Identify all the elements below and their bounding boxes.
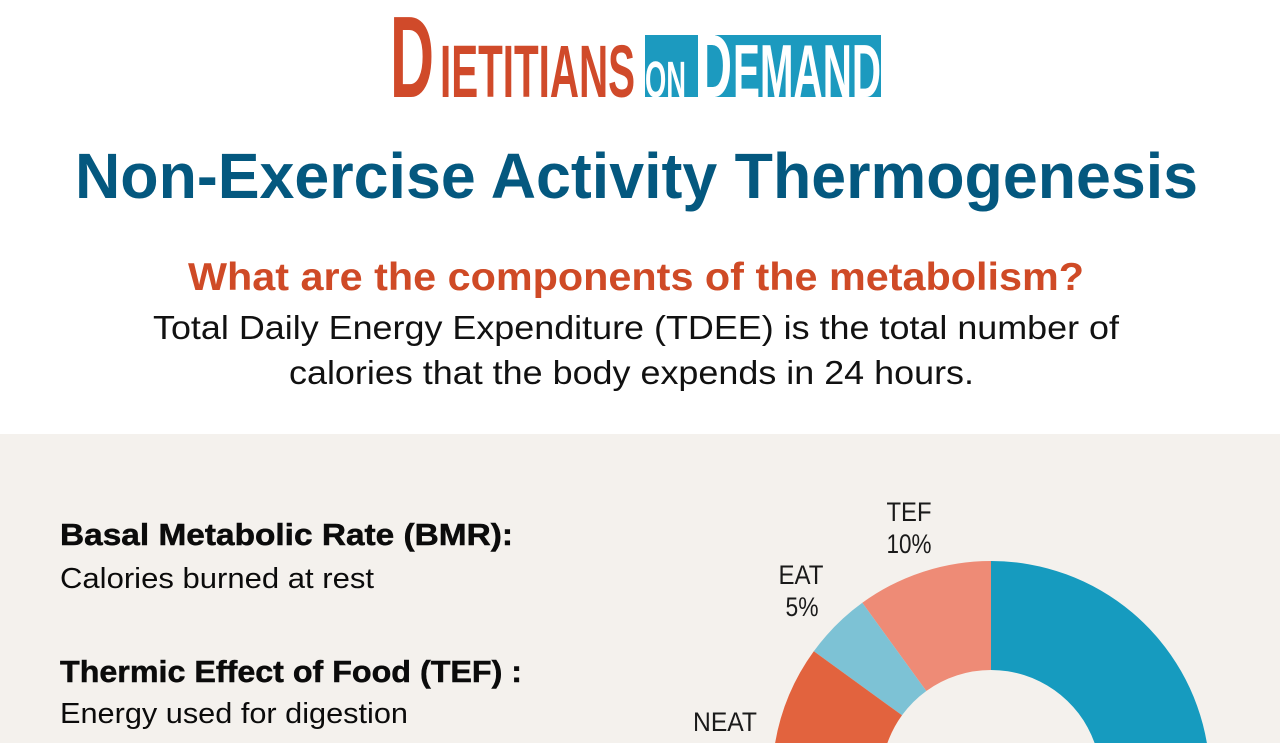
chart label: NEAT: NEAT [693, 707, 757, 737]
chart label: TEF: TEF [886, 497, 932, 527]
text block: BMR: Basal Metabolic Rate (BMR): [60, 517, 513, 552]
donut chart [775, 561, 1207, 743]
intro text [153, 309, 1120, 391]
text block: BMR [60, 517, 513, 595]
text block: TEF [60, 654, 522, 730]
text block: TEF: Thermic Effect of Food (TEF) : [60, 654, 522, 689]
logo: Dietitians on Demand: IETITIANS [440, 30, 635, 113]
panel: metabolism components [0, 434, 1280, 743]
title: Non-Exercise Activity Thermogenesis [75, 140, 1198, 212]
segment: NEAT [775, 651, 902, 743]
intro text: calories that the body expends in 24 hours. [289, 354, 974, 391]
subheading: What are the components of the metabolism? [188, 256, 1084, 299]
logo: Dietitians on Demand [390, 0, 881, 122]
segment: BMR [991, 561, 1207, 743]
chart label: TEF [886, 497, 932, 559]
logo: Dietitians on Demand: D [697, 17, 732, 117]
chart label: EAT: EAT [778, 560, 824, 590]
logo: Dietitians on Demand: EMAND [733, 29, 881, 113]
chart label: EAT: 5% [786, 592, 818, 622]
text block: TEF: Energy used for digestion [60, 698, 408, 730]
text block: BMR: Calories burned at rest [60, 563, 374, 595]
segment: TEF 10% [862, 561, 991, 691]
logo: Dietitians on Demand: ON [645, 51, 686, 108]
segment: EAT 5% [814, 603, 926, 715]
intro text: Total Daily Energy Expenditure (TDEE) is the total number of [153, 309, 1120, 346]
chart label: TEF: 10% [886, 529, 932, 559]
chart label: EAT [778, 560, 824, 622]
